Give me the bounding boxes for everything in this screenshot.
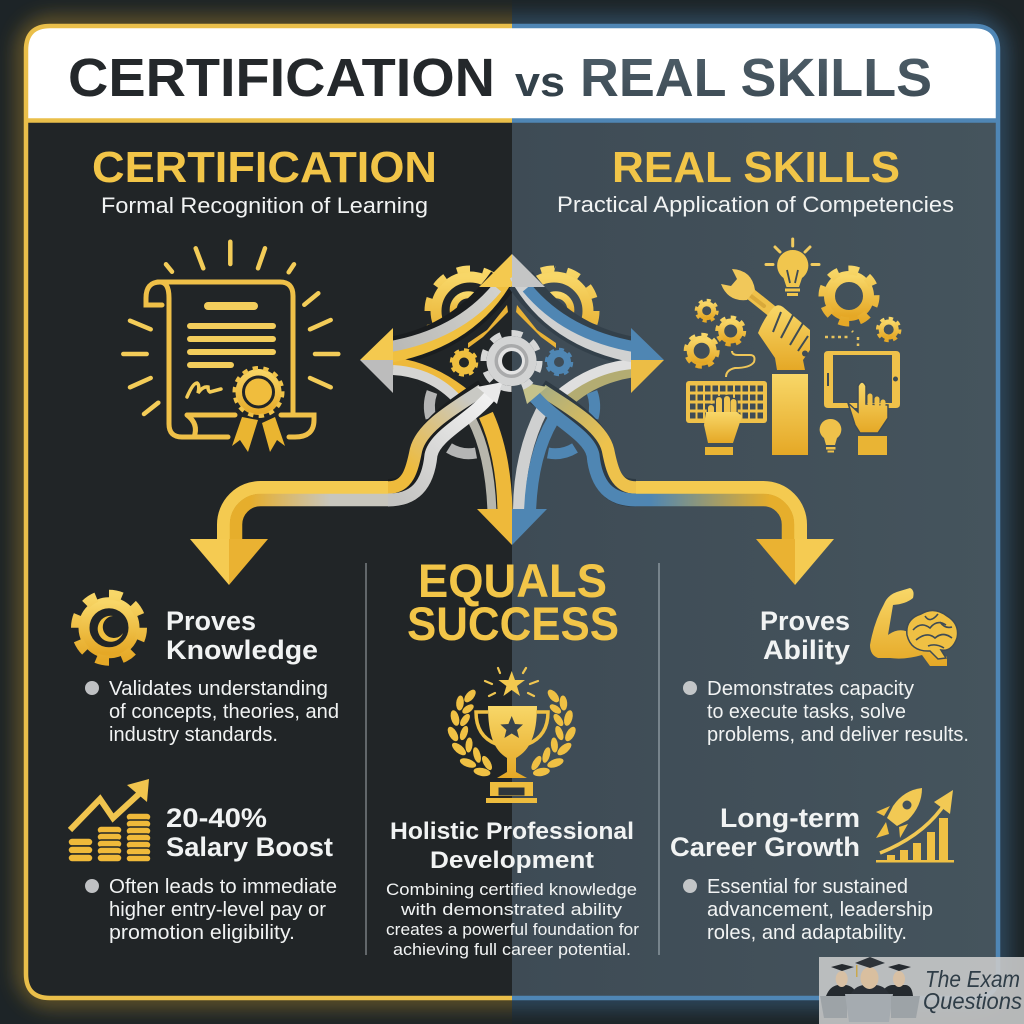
heading: certification [92,143,437,218]
icon: large gear [823,270,875,322]
heading: equals success: EQUALS [418,554,607,607]
watermark: the exam questions [819,957,1024,1024]
block: salary boost [68,779,337,944]
gear: small blue [546,350,572,374]
text [109,876,337,944]
text: advancement, leadership [707,899,933,921]
block: proves ability [683,588,969,746]
heading [760,606,850,665]
icon: light bulb [766,239,819,296]
graduates [820,957,920,1022]
central arrows and gears [190,254,834,585]
text: problems, and deliver results. [707,724,969,746]
heading: Ability [763,635,850,665]
text [386,880,639,959]
wordmark [923,966,1022,1014]
icon: tablet and pointing hand [824,351,900,455]
column dividers [366,563,659,955]
text: Demonstrates capacity [707,678,914,700]
wordmark: Questions [923,988,1022,1014]
icon: muscle and brain [870,588,958,666]
title: REAL SKILLS [580,48,932,108]
text: Combining certified knowledge [386,880,637,899]
panel: real skills background [512,122,996,996]
arrow: crossing from left [388,382,503,500]
gear: small gold [452,350,476,375]
arrow: right bent down [634,488,834,585]
gear: upper left gold [428,269,512,353]
base [486,782,537,803]
text: roles, and adaptability. [707,922,907,944]
heading [390,818,634,874]
text: Validates understanding [109,678,328,700]
heading: Salary Boost [166,832,333,862]
heading: real skills: Practical Application of Competencies [557,192,954,217]
icon: small bulb [820,419,841,452]
gear: upper right gold [512,269,596,353]
arrow: left bent down [190,488,390,585]
heading: Development [430,847,594,874]
heading [166,803,333,862]
heading: equals success: SUCCESS [407,597,619,650]
text [707,678,969,746]
gear: centre silver [484,333,540,389]
text: with demonstrated ability [400,900,623,919]
text: Essential for sustained [707,876,908,898]
icon: keyboard and hand [686,351,767,455]
icon: left gears [686,301,744,366]
gear fragment: inner gold right [516,305,556,348]
icon: fist and forearm [758,305,810,455]
arrow: left [360,254,512,397]
icon: certificate scroll [123,242,338,452]
text: creates a powerful foundation for [386,920,639,939]
heading: 20-40% [166,803,267,833]
header band [26,26,998,121]
text [109,678,339,746]
heading: real skills: REAL SKILLS [612,143,900,192]
bullet [85,879,99,893]
bullet [85,681,99,695]
laurel right [529,688,578,777]
heading: Holistic Professional [390,818,634,845]
icon: trophy with laurels [446,668,578,803]
text: Often leads to immediate [109,876,337,898]
text: promotion eligibility. [109,922,295,944]
block: holistic professional development [386,818,639,959]
heading: certification: CERTIFICATION [92,143,437,192]
text: of concepts, theories, and [109,701,339,723]
heading: Career Growth [670,832,860,862]
heading [166,606,318,665]
arrow: right [512,254,664,400]
heading [670,803,860,862]
text: achieving full career potential. [393,940,631,959]
text: higher entry-level pay or [109,899,326,921]
heading: equals success [407,554,619,650]
heading: Long-term [720,803,860,833]
bullet [683,681,697,695]
heading: Knowledge [166,635,318,665]
title: vs [515,58,565,105]
gear fragments: lower blue [548,392,595,454]
text [707,876,933,944]
icon: small gear right [878,319,899,340]
icon: rocket and bar chart [876,788,954,862]
backing for right gears [512,278,629,410]
icon: connector dots [825,331,858,346]
icon: coins and arrow [68,779,151,862]
bullet [683,879,697,893]
title [68,48,932,108]
arrow: crossing from right [521,382,636,500]
cup [488,706,537,778]
heading: Proves [166,606,256,636]
laurel left [446,688,494,777]
gear fragment: inner gold left [468,305,508,348]
icon: gear with crescent [76,595,142,661]
block: long-term career growth [670,788,954,944]
heading: certification: Formal Recognition of Learning [101,193,428,218]
text: to execute tasks, solve [707,701,906,723]
panel: certification background [28,122,512,996]
icon: skills collage [686,239,900,455]
block: proves knowledge [76,595,339,746]
title: CERTIFICATION [68,48,495,108]
icon: wrench [721,269,773,312]
text: industry standards. [109,724,278,746]
star and rays [485,668,538,696]
arrow: bottom centre [472,410,553,545]
gear fragments: lower grey [429,392,476,454]
heading: Proves [760,606,850,636]
backing for gears under arrows [395,278,512,410]
heading: real skills [557,143,954,217]
